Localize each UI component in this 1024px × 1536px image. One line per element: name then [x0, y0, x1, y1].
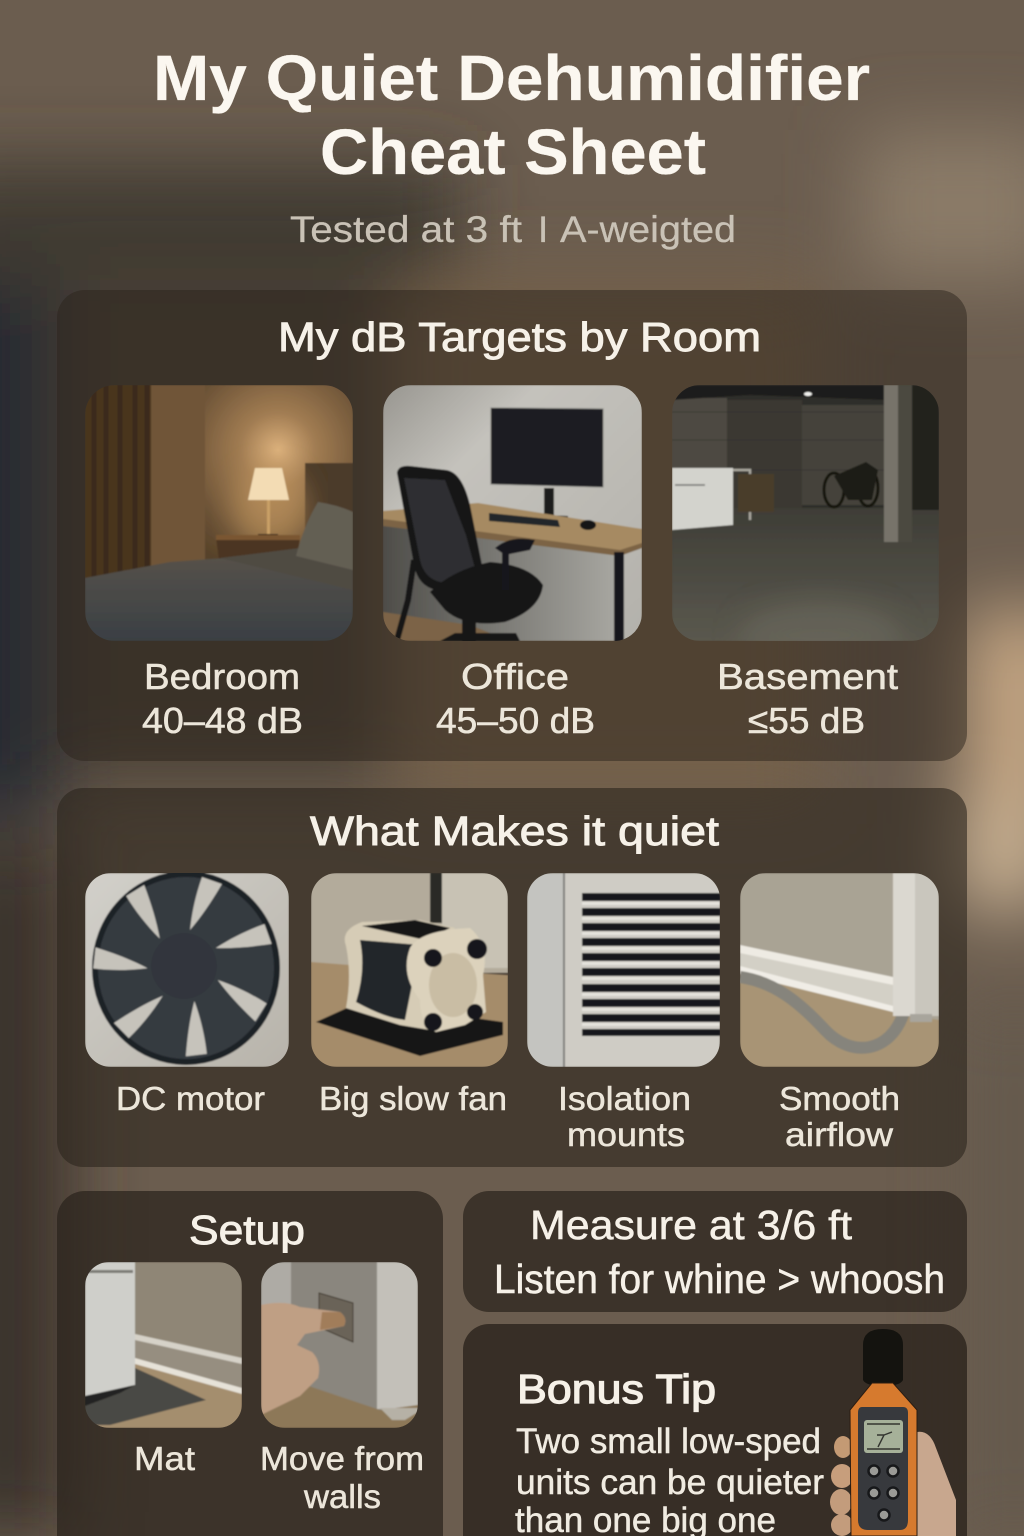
panel: dB targets by room	[57, 290, 967, 761]
heading: what makes it quiet: What Makes it quiet	[310, 808, 720, 854]
panel: measure	[463, 1191, 967, 1312]
heading: dB targets: My dB Targets by Room	[278, 314, 761, 360]
label: bedroom	[142, 656, 303, 741]
subtitle: Tested at 3 ft	[290, 209, 523, 250]
photo: mat	[85, 1262, 242, 1428]
text: listen for whine: Listen for whine > whoosh	[494, 1256, 945, 1302]
label: office	[436, 656, 595, 741]
photo: move from walls	[261, 1262, 418, 1428]
label: office: 45–50 dB	[436, 700, 595, 741]
label: office: Office	[461, 656, 569, 697]
subtitle	[290, 209, 736, 250]
label: smooth airflow	[779, 1080, 900, 1153]
heading: bonus tip: Bonus Tip	[517, 1366, 716, 1412]
subtitle: A-weigted	[560, 209, 736, 250]
text: bonus tip body	[515, 1422, 824, 1536]
panel: setup	[57, 1191, 443, 1536]
photo: vent grille	[527, 873, 720, 1067]
label: basement	[717, 656, 898, 741]
label: isolation mounts	[558, 1080, 691, 1153]
photo: smooth airflow hose	[740, 873, 939, 1067]
photo: basement	[672, 385, 939, 641]
label: mat: Mat	[134, 1440, 195, 1477]
photo: DC motor fan	[85, 873, 289, 1067]
photo: office	[383, 385, 642, 642]
title	[153, 42, 870, 188]
heading: setup: Setup	[189, 1207, 305, 1253]
text: bonus tip body: units can be quieter	[516, 1463, 824, 1502]
text: bonus tip body: Two small low-sped	[516, 1422, 821, 1461]
label: DC motor: DC motor	[116, 1080, 265, 1117]
label: move from walls: walls	[303, 1478, 381, 1515]
label: isolation mounts: mounts	[567, 1116, 685, 1153]
icon: sound level meter in hand	[830, 1329, 956, 1536]
label: basement: Basement	[717, 656, 898, 697]
photo: bedroom	[85, 385, 353, 641]
subtitle: I	[538, 209, 548, 250]
label: bedroom: 40–48 dB	[142, 700, 303, 741]
label: smooth airflow: Smooth	[779, 1080, 900, 1117]
label: smooth airflow: airflow	[785, 1116, 893, 1153]
label: isolation mounts: Isolation	[558, 1080, 691, 1117]
panel: bonus tip	[463, 1324, 967, 1536]
text: measure at 3/6 ft: Measure at 3/6 ft	[530, 1202, 853, 1248]
label: move from walls: Move from	[260, 1440, 424, 1477]
title: Cheat Sheet	[320, 116, 706, 188]
label: basement: ≤55 dB	[748, 700, 865, 741]
label: bedroom: Bedroom	[144, 656, 300, 697]
panel: what makes it quiet	[57, 788, 967, 1167]
photo: isolation pump	[311, 873, 508, 1067]
label: move from walls	[260, 1440, 424, 1515]
title: My Quiet Dehumidifier	[153, 42, 870, 114]
label: big slow fan: Big slow fan	[319, 1080, 507, 1117]
